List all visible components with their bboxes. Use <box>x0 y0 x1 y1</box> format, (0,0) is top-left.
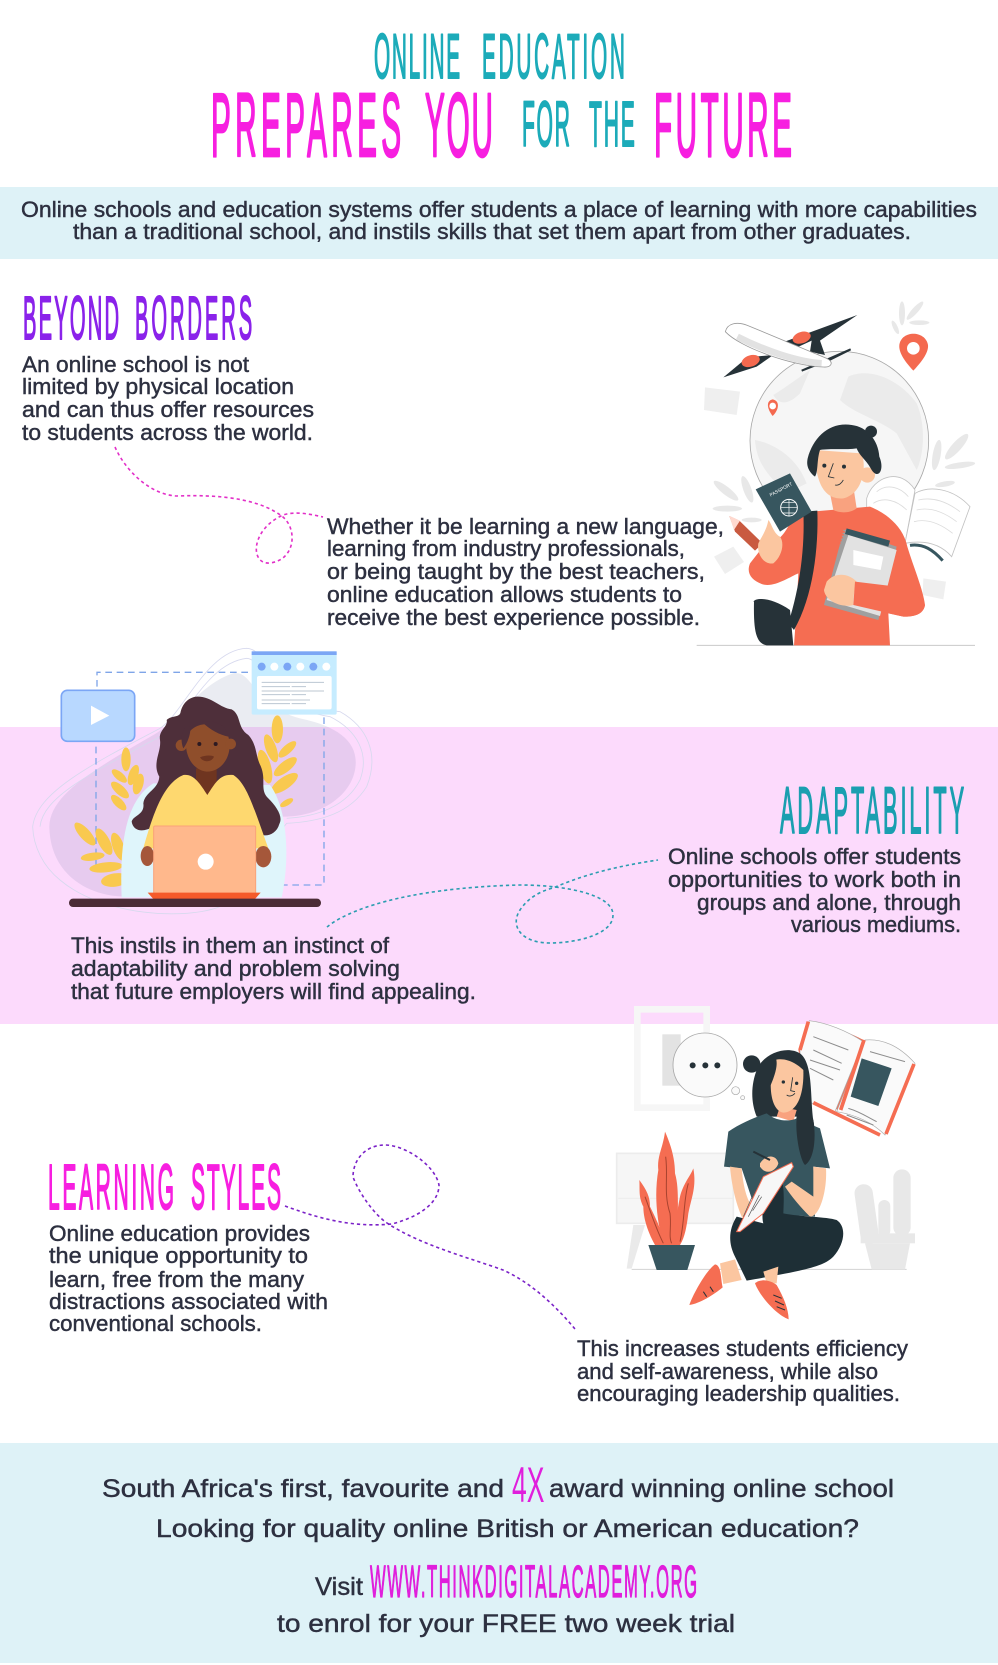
heading: beyond borders: BEYOND <box>23 284 119 352</box>
footer call to action: 4X <box>512 1458 544 1513</box>
text: adaptability detail: adaptability and problem solving <box>71 956 400 981</box>
panel: intro band <box>0 187 998 259</box>
footer call to action: South Africa's first, favourite and <box>102 1475 504 1503</box>
footer call to action: Looking for quality online British or American education? <box>156 1515 859 1543</box>
text: learning styles detail: encouraging leadership qualities. <box>577 1381 900 1406</box>
footer call to action: Visit <box>315 1573 363 1601</box>
panel: adaptability band <box>0 727 998 1024</box>
arrow: purple dashed curve <box>285 1145 575 1329</box>
text: adaptability detail <box>71 933 476 1004</box>
illustration: student with passport and globe <box>697 300 976 645</box>
text: learning styles intro: Online education provides <box>49 1221 310 1246</box>
text: adaptability intro: opportunities to work both in <box>668 867 961 892</box>
heading: learning styles: STYLES <box>191 1153 281 1224</box>
panel: footer band <box>0 1443 998 1663</box>
text: beyond borders intro: and can thus offer resources <box>22 397 314 422</box>
illustration: girl writing in notebook <box>617 1009 915 1319</box>
footer call to action <box>102 1458 894 1638</box>
icon: browser window <box>252 651 337 715</box>
footer call to action: WWW.THINKDIGITALACADEMY.ORG <box>370 1557 697 1608</box>
title: FUTURE <box>654 75 792 176</box>
intro text <box>21 197 977 244</box>
text: learning styles intro: learn, free from the many <box>49 1267 304 1292</box>
text: beyond borders intro: limited by physical location <box>22 374 294 399</box>
text: adaptability intro: Online schools offer students <box>668 844 961 869</box>
text: beyond borders detail: online education allows students to <box>327 582 682 607</box>
icon: video player <box>61 690 135 741</box>
heading: learning styles <box>48 1153 281 1224</box>
title: ONLINE <box>374 22 460 91</box>
text: beyond borders detail: receive the best experience possible. <box>327 605 700 630</box>
arrow: magenta dashed curve <box>115 447 323 563</box>
text: learning styles intro: distractions associated with <box>49 1289 328 1314</box>
text: adaptability intro: various mediums. <box>791 912 961 937</box>
heading: adaptability: ADAPTABILITY <box>780 775 964 848</box>
text: learning styles detail: and self-awareness, while also <box>577 1359 878 1384</box>
text: learning styles detail <box>577 1336 908 1406</box>
title: THE <box>589 90 635 161</box>
text: beyond borders intro: An online school is not <box>22 352 249 377</box>
heading: learning styles: LEARNING <box>48 1153 174 1224</box>
footer call to action: award winning online school <box>549 1475 894 1503</box>
illustration: student with passport and globe: PASSPORT <box>769 481 793 498</box>
text: beyond borders intro: to students across the world. <box>22 420 313 445</box>
title <box>211 22 792 176</box>
arrow: teal dashed curve <box>327 860 658 943</box>
text: learning styles detail: This increases students efficiency <box>577 1336 908 1361</box>
heading: beyond borders <box>23 284 252 352</box>
text: adaptability detail: that future employers will find appealing. <box>71 979 476 1004</box>
title: EDUCATION <box>482 22 625 91</box>
text: adaptability detail: This instils in them an instinct of <box>71 933 390 958</box>
text: beyond borders detail: Whether it be learning a new language, <box>327 514 724 539</box>
title: YOU <box>425 75 493 176</box>
text: beyond borders detail: learning from industry professionals, <box>327 536 685 561</box>
title: FOR <box>522 90 570 161</box>
footer call to action: to enrol for your FREE two week trial <box>277 1610 735 1638</box>
text: beyond borders detail: or being taught by the best teachers, <box>327 559 705 584</box>
text: beyond borders detail <box>327 514 724 630</box>
text: learning styles intro: the unique opportunity to <box>49 1243 308 1268</box>
text: learning styles intro: conventional schools. <box>49 1311 262 1336</box>
intro text: Online schools and education systems offer students a place of learning with more capabilities <box>21 197 977 222</box>
text: adaptability intro <box>668 844 961 937</box>
heading: beyond borders: BORDERS <box>135 284 252 352</box>
text: beyond borders intro <box>22 352 314 445</box>
text: adaptability intro: groups and alone, through <box>697 890 961 915</box>
title: PREPARES <box>211 75 401 176</box>
intro text: than a traditional school, and instils skills that set them apart from other graduates. <box>73 219 911 244</box>
illustration: woman at laptop <box>33 648 372 914</box>
text: learning styles intro <box>49 1221 328 1336</box>
